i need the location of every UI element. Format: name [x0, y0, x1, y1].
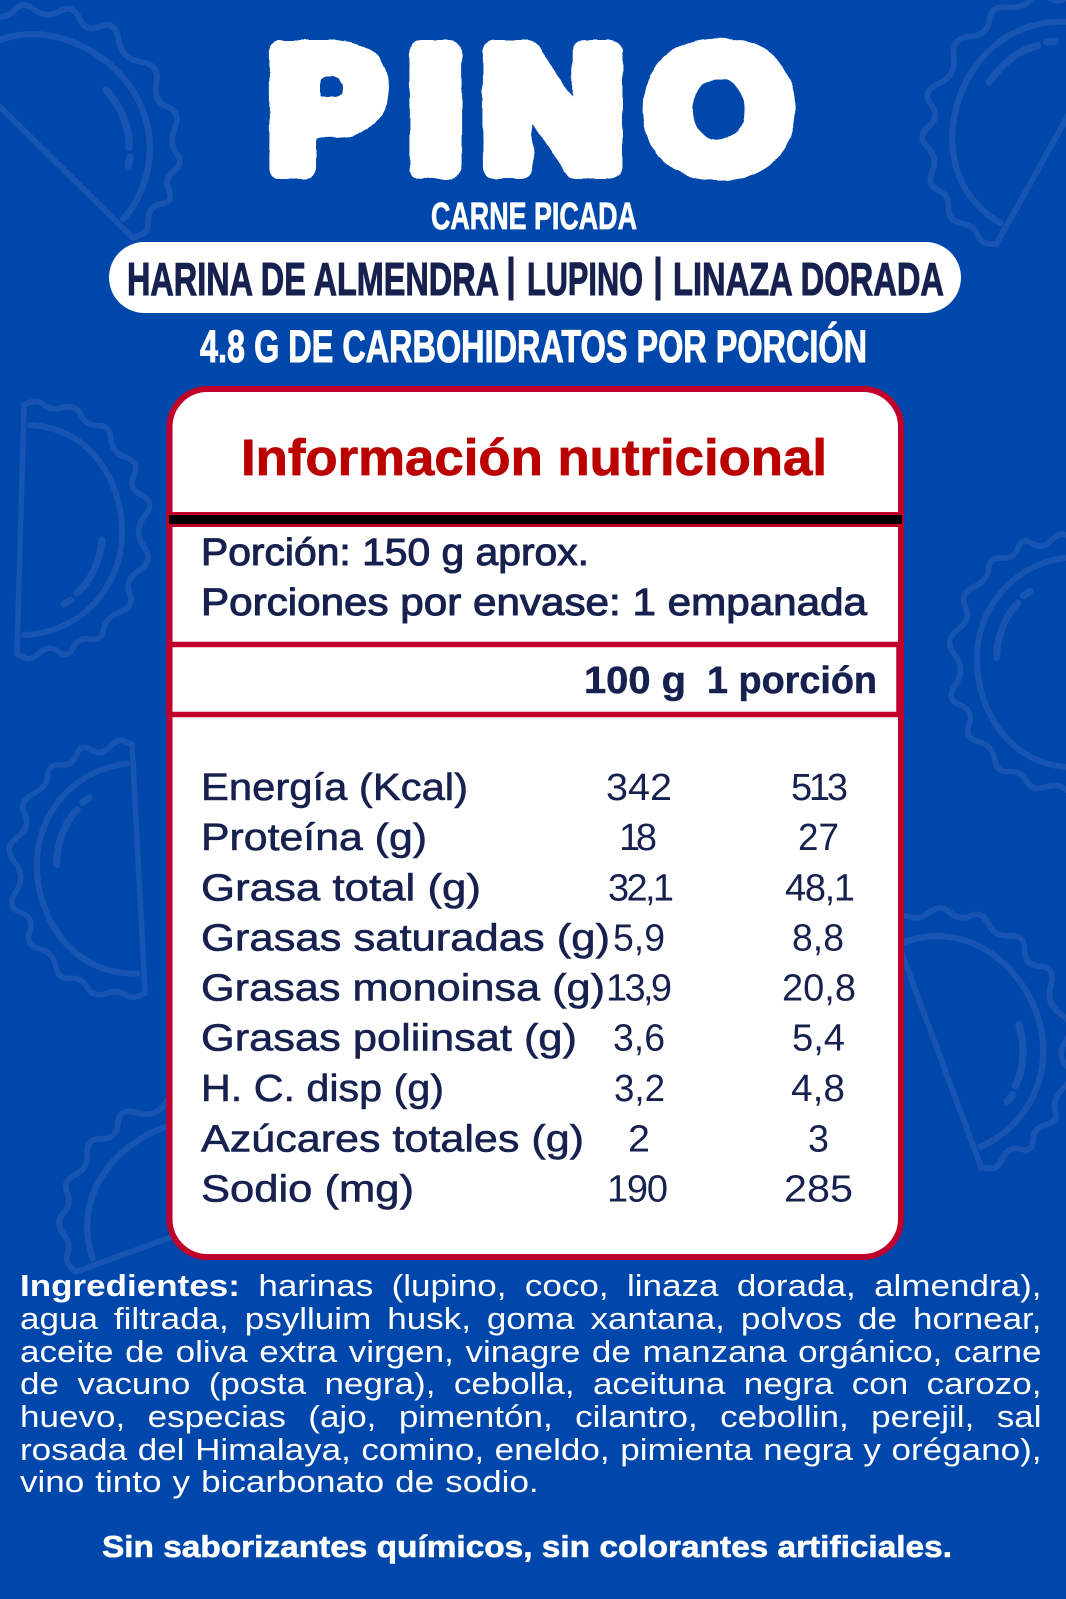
- row: protein: 27: [798, 817, 839, 859]
- row: monounsaturated fat: Grasas monoinsa (g): [201, 968, 605, 1010]
- row: available carbs: H. C. disp (g): [201, 1068, 444, 1110]
- icon: empanada middle right upper: [941, 533, 1066, 799]
- row: energy: Energía (Kcal): [201, 767, 468, 809]
- ingredients text: huevo, especias (ajo, pimentón, cilantro, cebollin, perejil, sal: [20, 1399, 1042, 1434]
- panel: nutrition table: [166, 389, 904, 1257]
- title: I: [409, 15, 462, 205]
- flour pill: LINAZA DORADA: [673, 253, 944, 305]
- row: energy: [201, 767, 848, 809]
- thick divider: [166, 512, 904, 527]
- row: saturated fat: [201, 918, 844, 960]
- row: total fat: 32,1: [608, 868, 674, 910]
- column header box: 1 porción: [707, 660, 877, 702]
- ingredients text: agua filtrada, psylluim husk, goma xantana, polvos de hornear,: [20, 1301, 1042, 1336]
- row: saturated fat: Grasas saturadas (g): [201, 918, 610, 960]
- footer claim: Sin saborizantes químicos, sin colorantes artificiales.: [102, 1529, 952, 1564]
- ingredients text: aceite de oliva extra virgen, vinagre de manzana orgánico, carne: [20, 1334, 1042, 1368]
- row: sugars: 3: [808, 1118, 829, 1160]
- column header box: 100 g: [584, 660, 686, 702]
- flour pill: HARINA DE ALMENDRA: [127, 253, 499, 305]
- row: energy: 342: [606, 767, 672, 809]
- row: sugars: 2: [628, 1118, 650, 1160]
- icon: empanada top right: [879, 0, 1066, 251]
- row: polyunsaturated fat: [201, 1018, 845, 1060]
- row: sodium: 190: [607, 1168, 668, 1210]
- row: monounsaturated fat: 13,9: [606, 968, 672, 1010]
- icon: empanada top left: [0, 0, 233, 241]
- row: saturated fat: 5,9: [613, 918, 665, 960]
- row: sodium: 285: [784, 1168, 853, 1210]
- ingredients text: Ingredientes: harinas (lupino, coco, linaza dorada, almendra),: [20, 1268, 1042, 1303]
- row: polyunsaturated fat: 5,4: [792, 1018, 845, 1060]
- ingredients text: rosada del Himalaya, comino, eneldo, pimienta negra y orégano),: [20, 1432, 1042, 1467]
- icon: empanada middle right lower: [883, 872, 1066, 1172]
- serving info: Porción: 150 g aprox.: [201, 532, 589, 574]
- row: sodium: [201, 1168, 853, 1210]
- row: available carbs: 4,8: [791, 1068, 845, 1110]
- title: P: [269, 15, 384, 205]
- ingredients text: vino tinto y bicarbonato de sodio.: [20, 1464, 539, 1499]
- row: monounsaturated fat: 20,8: [782, 968, 856, 1010]
- heading: Información nutricional: [241, 429, 827, 486]
- title: [269, 15, 791, 205]
- row: monounsaturated fat: [201, 968, 856, 1010]
- row: total fat: [201, 868, 855, 910]
- row: total fat: 48,1: [785, 868, 855, 910]
- title: O: [647, 15, 791, 205]
- nutrition rows: [201, 767, 856, 1210]
- row: polyunsaturated fat: 3,6: [613, 1018, 665, 1060]
- ingredients text: [20, 1268, 1042, 1499]
- flour pill: LUPINO: [527, 253, 643, 305]
- icon: empanada middle left lower: [0, 739, 152, 1007]
- row: sugars: [201, 1118, 829, 1160]
- row: available carbs: [201, 1068, 845, 1110]
- row: sugars: Azúcares totales (g): [201, 1118, 584, 1160]
- row: protein: Proteína (g): [201, 817, 427, 859]
- flour pill: [109, 242, 961, 313]
- icon: empanada middle left upper: [17, 401, 150, 659]
- ingredients text: de vacuno (posta negra), cebolla, aceituna negra con carozo,: [20, 1366, 1042, 1401]
- title: N: [482, 15, 623, 205]
- row: sodium: Sodio (mg): [201, 1168, 414, 1210]
- row: total fat: Grasa total (g): [201, 868, 481, 910]
- row: polyunsaturated fat: Grasas poliinsat (g): [201, 1018, 577, 1060]
- column header box: [169, 644, 899, 714]
- serving info: [201, 532, 868, 624]
- row: energy: 513: [791, 767, 848, 809]
- serving info: Porciones por envase: 1 empanada: [201, 582, 868, 624]
- subtitle: CARNE PICADA: [431, 196, 637, 238]
- icon: empanada bottom left: [24, 1053, 324, 1280]
- row: protein: 18: [619, 817, 657, 859]
- row: protein: [201, 817, 839, 859]
- row: saturated fat: 8,8: [792, 918, 844, 960]
- row: available carbs: 3,2: [614, 1068, 665, 1110]
